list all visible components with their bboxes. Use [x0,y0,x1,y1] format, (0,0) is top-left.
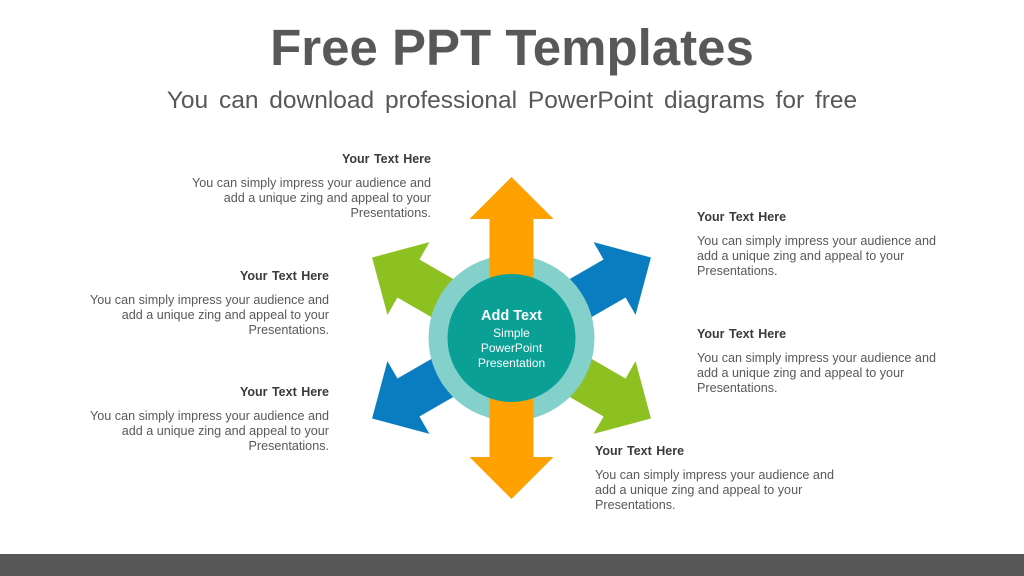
title: Free PPT Templates [270,19,754,76]
text block: mid-right: Your Text Here [697,327,786,341]
text block: top-right: You can simply impress your audience and add a unique zing and appeal to your Presentations. [697,234,936,278]
center circle [448,274,576,402]
text block: mid-right [697,327,936,395]
text block: top-left [192,152,431,220]
outer ring [428,255,594,421]
text block: mid-right: You can simply impress your audience and add a unique zing and appeal to your Presentations. [697,350,936,395]
subtitle: You can download professional PowerPoint diagrams for free [167,87,857,114]
text block: mid-left [90,269,329,337]
arrow: upper-right blue [490,221,672,374]
text block: bottom-right [595,444,834,512]
center text: PowerPoint [481,341,543,355]
footer bar [0,554,1024,576]
arrow: up orange [470,177,554,338]
text block: bottom-left: Your Text Here [240,385,329,399]
center text: Presentation [478,356,545,370]
center text: Simple [493,326,530,340]
text block: bottom-right: Your Text Here [595,444,684,458]
text block: top-left: You can simply impress your audience and add a unique zing and appeal to your Presentations. [192,176,431,220]
arrow: lower-left blue [351,302,532,455]
text block: top-right [697,210,936,278]
text block: mid-left: Your Text Here [240,269,329,283]
text block: bottom-left: You can simply impress your audience and add a unique zing and appeal to your Presentations. [90,408,329,453]
arrow: lower-right green [490,302,672,455]
text block: bottom-left [90,385,329,453]
text block: top-left: Your Text Here [342,152,431,166]
center text: Add Text [481,308,542,324]
text block: bottom-right: You can simply impress your audience and add a unique zing and appeal to your Presentations. [595,468,834,512]
center text [478,308,545,370]
text block: top-right: Your Text Here [697,210,786,224]
arrow: upper-left green [351,221,532,374]
text block: mid-left: You can simply impress your audience and add a unique zing and appeal to your Presentations. [90,292,329,337]
arrow: down orange [470,338,554,499]
